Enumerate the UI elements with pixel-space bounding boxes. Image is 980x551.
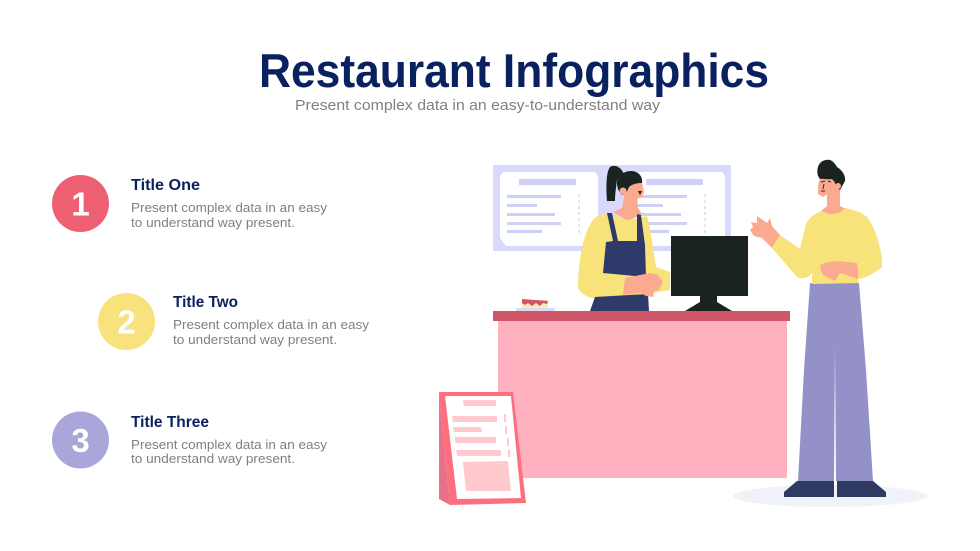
- item 3 text: to understand way present.: [131, 451, 295, 466]
- mouth: [638, 191, 642, 195]
- ponytail: [606, 166, 624, 201]
- title: Restaurant Infographics: [259, 44, 769, 97]
- yellow sweater: [772, 208, 882, 284]
- badge 3: [52, 412, 109, 468]
- badge 3: 3: [71, 422, 90, 459]
- item 1 text: to understand way present.: [131, 215, 295, 230]
- yellow sweater: [578, 213, 670, 298]
- illustration: restaurant counter scene: [439, 160, 927, 507]
- item 2 title: Title Two: [173, 294, 238, 311]
- ear: [835, 183, 841, 189]
- item 3 text: Present complex data in an easy: [131, 437, 328, 452]
- ear: [620, 188, 626, 194]
- facial features: [821, 181, 831, 191]
- monitor: [671, 236, 748, 311]
- face: [818, 176, 838, 197]
- menu sign: [439, 392, 526, 505]
- badge 2: 2: [117, 304, 136, 340]
- item 2 text: Present complex data in an easy: [173, 317, 370, 332]
- subtitle: Present complex data in an easy-to-understand way: [295, 97, 661, 114]
- front hand: [820, 261, 858, 281]
- face: [622, 178, 644, 199]
- counter: [493, 311, 790, 478]
- trousers: [798, 283, 873, 481]
- item 2 text: to understand way present.: [173, 332, 337, 347]
- neck: [821, 186, 846, 216]
- raised hand: [750, 216, 780, 248]
- shoes: [784, 481, 886, 497]
- apron: [590, 213, 649, 311]
- item 2 text: [173, 317, 370, 347]
- hand: [623, 273, 663, 297]
- item 1 text: [131, 200, 328, 230]
- item 3 title: Title Three: [131, 414, 209, 431]
- cake: [516, 299, 555, 311]
- badge 1: 1: [71, 186, 90, 222]
- item 1 text: Present complex data in an easy: [131, 200, 328, 215]
- floor shadow: [733, 485, 927, 507]
- menu board: [493, 165, 731, 251]
- woman cashier: [578, 166, 670, 311]
- item 3: [52, 412, 328, 468]
- hair: [817, 160, 845, 190]
- item 1 title: Title One: [131, 177, 200, 194]
- badge 1: [52, 175, 109, 232]
- hair: [617, 171, 642, 195]
- neck: [613, 192, 642, 221]
- item 2: [98, 293, 370, 350]
- man customer: [750, 160, 886, 497]
- badge 2: [98, 293, 155, 350]
- item 1: [52, 175, 328, 232]
- item 3 text: [131, 437, 328, 466]
